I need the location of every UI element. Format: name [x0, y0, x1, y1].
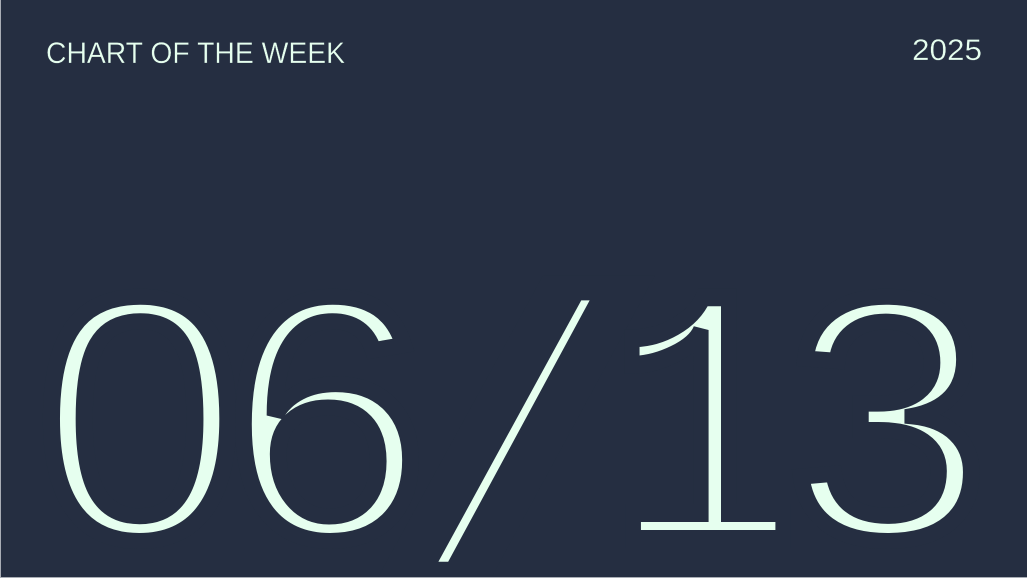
large date 06/13	[37, 218, 987, 578]
year label: 2025	[912, 34, 982, 67]
heading: chart of the week: CHART OF THE WEEK	[46, 37, 345, 70]
